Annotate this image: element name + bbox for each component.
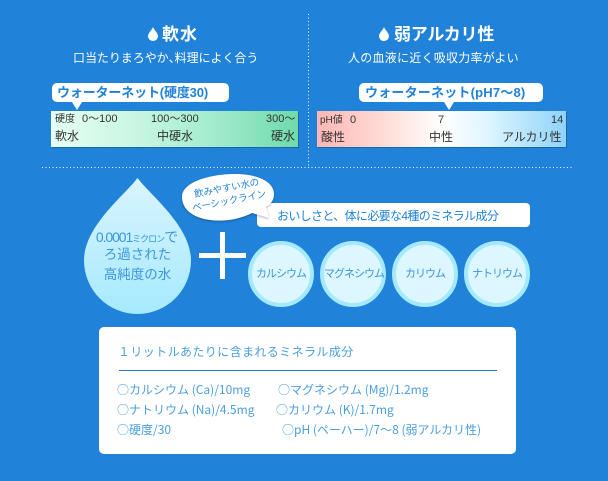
weak alkaline subtitle: 人の血液に近く吸収力率がよい [348, 51, 519, 65]
soft water heading [148, 25, 198, 44]
hardness scale bar: 硬水 [271, 129, 295, 143]
mineral circle: potassium [392, 241, 458, 307]
bubble text: 飲みやすい水の [193, 177, 260, 200]
drop text: ろ過された [104, 247, 171, 262]
hardness scale bar [51, 111, 298, 147]
pH scale bar: 0 [350, 114, 356, 126]
mineral list: ○マグネシウム (Mg)/1.2mg [278, 381, 429, 398]
pH scale bar: アルカリ性 [502, 130, 562, 144]
mineral list [117, 381, 481, 438]
hardness scale bar: 軟水 [55, 129, 79, 143]
panel: minerals per liter [99, 327, 516, 454]
pH scale bar [317, 111, 566, 147]
icon: water drop [148, 27, 158, 41]
hardness scale bar: 中硬水 [157, 129, 193, 143]
callout: water net hardness: ウォーターネット(硬度30) [57, 85, 208, 100]
mineral list: ○硬度/30 [117, 421, 171, 438]
mineral list: ○カリウム (K)/1.7mg [276, 401, 394, 418]
pH scale bar: 中性 [429, 130, 453, 144]
callout: water net pH [359, 83, 543, 110]
hardness scale bar: 0～100 [82, 113, 117, 125]
mineral circle: calcium: カルシウム [256, 268, 306, 280]
heading text: 軟水 [162, 25, 198, 44]
scale labels: pH値 [320, 115, 343, 126]
mineral list: ○ナトリウム (Na)/4.5mg [117, 401, 254, 418]
bubble text [191, 177, 267, 214]
speech bubble [181, 174, 275, 223]
drop text: 高純度の水 [104, 267, 171, 282]
pH scale bar: 7 [438, 114, 444, 126]
panel: weak alkaline [317, 25, 567, 148]
plus sign [199, 232, 246, 279]
bubble text: ベーシックライン [191, 189, 267, 214]
mineral circle: sodium [464, 241, 530, 307]
pH scale bar: 14 [551, 114, 563, 126]
mineral circle: potassium: カリウム [405, 268, 445, 280]
weak alkaline heading [379, 25, 494, 44]
soft water subtitle: 口当たりまろやか、料理によく合う [73, 51, 258, 65]
pH scale bar: 酸性 [321, 130, 345, 144]
hardness scale bar: 100～300 [151, 113, 199, 125]
mineral circle: magnesium [320, 241, 386, 307]
callout: water net pH: ウォーターネット(pH7～8) [365, 85, 525, 100]
banner: four minerals [257, 203, 530, 227]
drop text: 0.0001ミクロンで [96, 229, 177, 245]
drop text [96, 229, 177, 282]
drop shape [84, 178, 191, 314]
banner text: おいしさと、体に必要な4種のミネラル成分 [277, 209, 498, 223]
large water drop [84, 178, 191, 314]
mineral circle: sodium: ナトリウム [472, 268, 522, 280]
panel: soft water [51, 25, 299, 148]
mineral circle: magnesium: マグネシウム [324, 268, 384, 280]
mineral circle: calcium [248, 241, 314, 307]
panel title: １リットルあたりに含まれるミネラル成分 [118, 345, 354, 359]
icon: water drop [379, 27, 389, 41]
hardness scale bar: 300～ [266, 113, 295, 125]
mineral list: ○カルシウム (Ca)/10mg [117, 381, 250, 398]
callout: water net hardness [52, 83, 229, 110]
mineral list: ○pH (ペーハー)/7～8 (弱アルカリ性) [282, 421, 481, 438]
heading text: 弱アルカリ性 [394, 25, 494, 44]
scale labels: 硬度 [55, 114, 75, 125]
